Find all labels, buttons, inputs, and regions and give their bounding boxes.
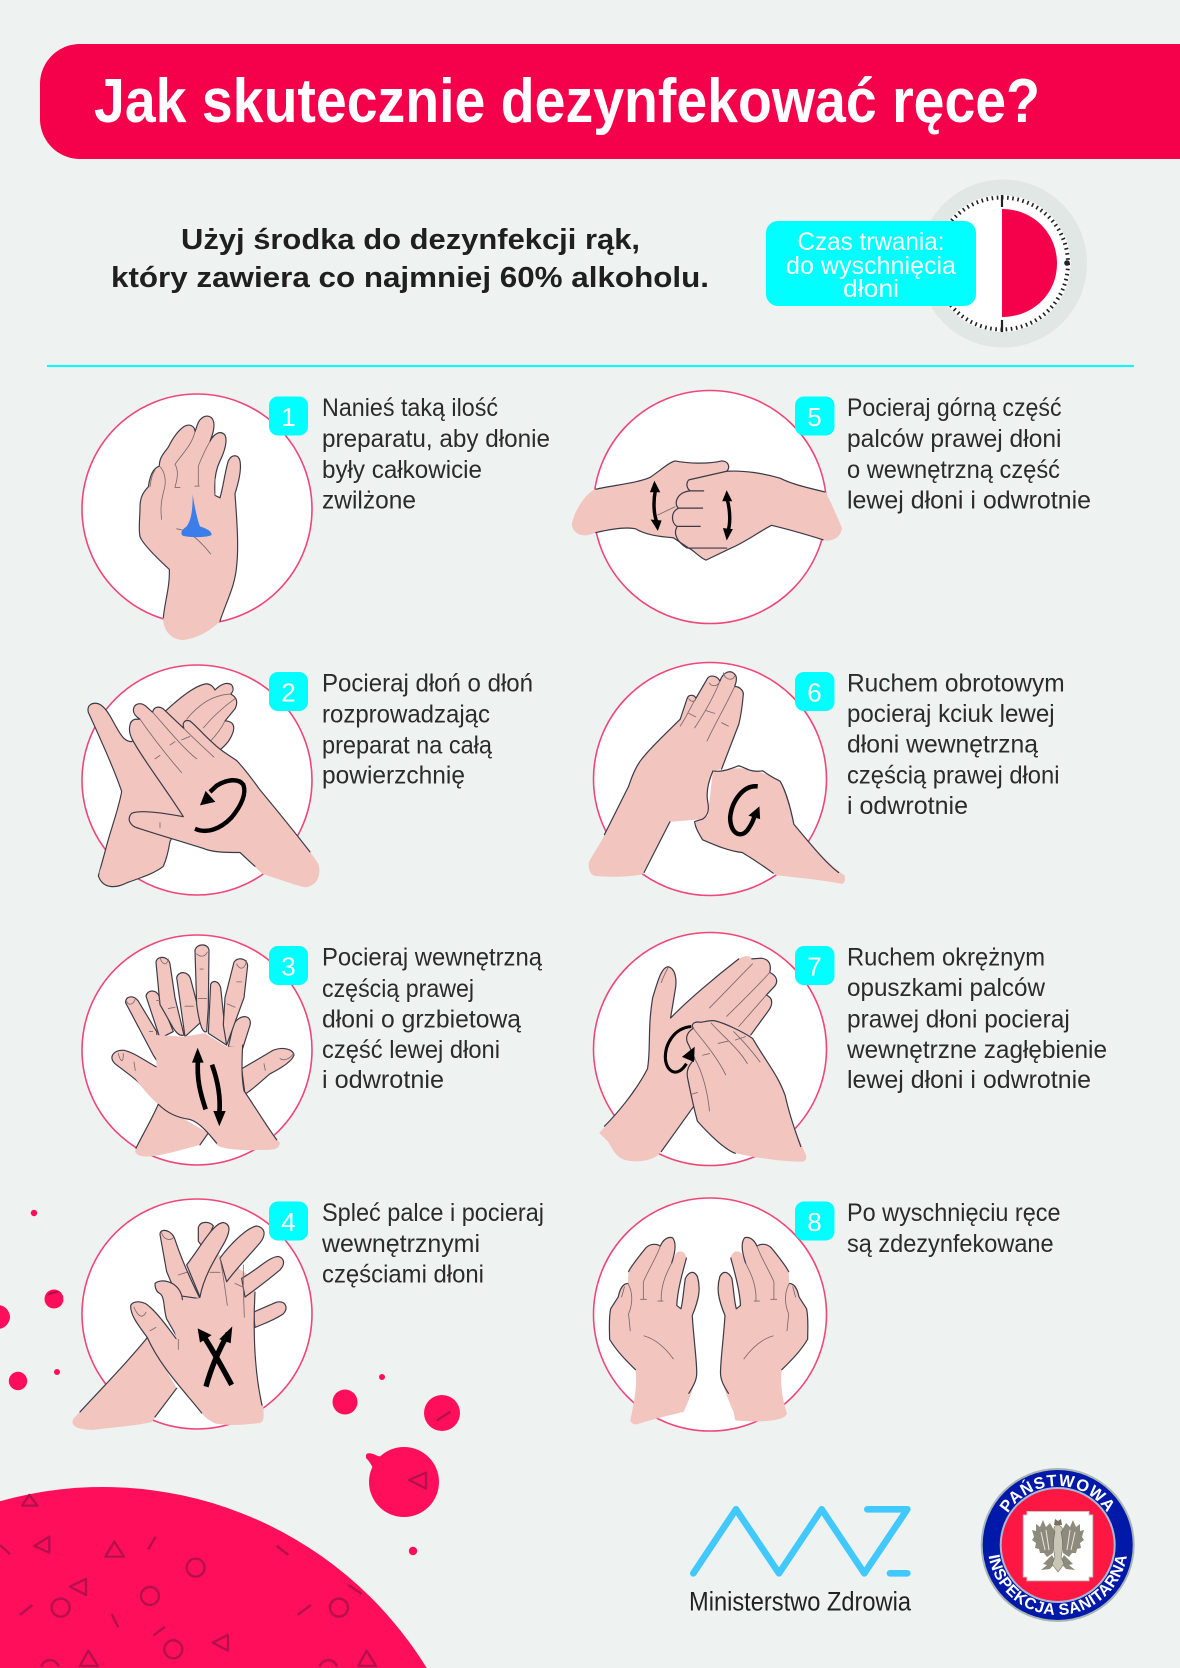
icon: white eagle emblem — [1032, 1519, 1084, 1572]
step 8 text — [847, 1199, 1060, 1258]
step 2 text: preparat na całą — [322, 732, 492, 760]
step 1 text: preparatu, aby dłonie — [322, 425, 550, 453]
badge: 2 — [269, 672, 308, 711]
step 3 text: i odwrotnie — [322, 1066, 444, 1094]
step 6 text: dłoni wewnętrzną — [847, 731, 1038, 759]
step 5 text: palców prawej dłoni — [847, 425, 1062, 453]
icon: palm over back of hand with arrows — [112, 945, 294, 1156]
badge: 1: 1 — [281, 402, 296, 432]
badge: 3 — [269, 946, 308, 985]
step 6 text: i odwrotnie — [847, 792, 968, 820]
step 7 text: Ruchem okrężnym — [847, 944, 1045, 972]
icon: fingertips on palm with circular arrow — [599, 956, 806, 1162]
logo: Ministerstwo Zdrowia: Ministerstwo Zdrowia — [689, 1587, 912, 1617]
step 1 text: Nanieś taką ilość — [322, 394, 498, 422]
panel: step 3 — [82, 935, 542, 1165]
timer icon — [919, 180, 1087, 348]
badge: 8: 8 — [807, 1207, 822, 1237]
title banner: Jak skutecznie dezynfekować ręce? — [94, 67, 1040, 136]
step 6 text: pocieraj kciuk lewej — [847, 700, 1055, 728]
background decoration: splashes — [0, 1210, 460, 1668]
badge: 6 — [795, 672, 834, 711]
step 2 text: Pocieraj dłoń o dłoń — [322, 670, 533, 698]
badge: 7 — [795, 946, 834, 985]
panel: step 6 — [589, 662, 1065, 896]
step 1 text — [322, 394, 550, 514]
panel: step 8 — [594, 1198, 1060, 1431]
intro text: Użyj środka do dezynfekcji rąk, — [181, 224, 640, 256]
step 7 text: prawej dłoni pocieraj — [847, 1006, 1070, 1034]
step 8 text: Po wyschnięciu ręce — [847, 1199, 1060, 1227]
step 2 text — [322, 670, 533, 790]
step 3 text: dłoni o grzbietową — [322, 1006, 521, 1034]
panel: step 1 — [82, 394, 550, 640]
duration callout: dłoni — [843, 275, 899, 303]
step 6 text — [847, 670, 1065, 820]
badge: 4 — [269, 1202, 308, 1240]
intro text — [111, 224, 709, 294]
badge: 6: 6 — [807, 678, 822, 708]
badge: 5 — [795, 396, 834, 436]
step 2 text: rozprowadzając — [322, 701, 490, 729]
icon: thumb rubbed in fist with arrow — [589, 672, 845, 884]
step 4 text: częściami dłoni — [322, 1260, 484, 1288]
step 3 text: część lewej dłoni — [322, 1036, 500, 1064]
step 7 text: lewej dłoni i odwrotnie — [847, 1066, 1091, 1094]
step 3 text: częścią prawej — [322, 975, 474, 1003]
panel: step 2 — [82, 665, 533, 895]
logo: Państwowa Inspekcja Sanitarna seal — [980, 1468, 1135, 1622]
step 5 text: o wewnętrzną część — [847, 456, 1060, 484]
duration callout: Czas trwania: — [798, 228, 944, 256]
badge: 7: 7 — [807, 952, 822, 982]
icon: two dry open hands — [609, 1237, 808, 1424]
step 2 text: powierzchnię — [322, 762, 465, 790]
panel: step 5 — [572, 390, 1091, 624]
icon: fingers on opposite palm with arrows — [572, 461, 842, 560]
step 6 text: częścią prawej dłoni — [847, 762, 1060, 790]
step 1 text: zwilżone — [322, 486, 416, 514]
logo: Państwowa Inspekcja Sanitarna seal: PAŃSTWOWA — [999, 1474, 1114, 1512]
step 5 text — [847, 394, 1091, 514]
badge: 4: 4 — [281, 1207, 296, 1237]
step 3 text — [322, 944, 542, 1094]
panel: step 4 — [72, 1199, 544, 1430]
icon: palm on palm with rotation arrow — [88, 683, 319, 887]
title banner — [40, 44, 1180, 159]
step 7 text — [846, 944, 1107, 1094]
step 5 text: lewej dłoni i odwrotnie — [847, 486, 1091, 514]
logo: Państwowa Inspekcja Sanitarna seal: INSPEKCJA SANITARNA — [988, 1554, 1127, 1615]
icon: interlaced fingers with crossed arrows — [72, 1222, 286, 1430]
duration callout: do wyschnięcia — [786, 252, 956, 280]
step 7 text: opuszkami palców — [847, 974, 1046, 1002]
badge: 5: 5 — [807, 402, 822, 432]
step 4 text: wewnętrznymi — [321, 1230, 480, 1258]
logo: Ministerstwo Zdrowia — [689, 1509, 912, 1617]
step 1 text: były całkowicie — [322, 456, 482, 484]
step 8 text: są zdezynfekowane — [847, 1230, 1054, 1258]
badge: 8 — [795, 1202, 834, 1240]
panel: step 7 — [594, 932, 1107, 1166]
badge: 2: 2 — [281, 678, 296, 708]
intro text: który zawiera co najmniej 60% alkoholu. — [111, 262, 709, 294]
badge: 3: 3 — [281, 952, 296, 982]
badge: 1 — [269, 396, 308, 436]
step 4 text: Spleć palce i pocieraj — [322, 1199, 544, 1227]
step 7 text: wewnętrzne zagłębienie — [846, 1036, 1107, 1064]
step 5 text: Pocieraj górną część — [847, 394, 1062, 422]
icon: open hand with disinfectant — [139, 416, 240, 640]
step 6 text: Ruchem obrotowym — [847, 670, 1065, 698]
step 4 text — [321, 1199, 544, 1288]
duration callout — [766, 221, 976, 306]
step 3 text: Pocieraj wewnętrzną — [322, 944, 542, 972]
